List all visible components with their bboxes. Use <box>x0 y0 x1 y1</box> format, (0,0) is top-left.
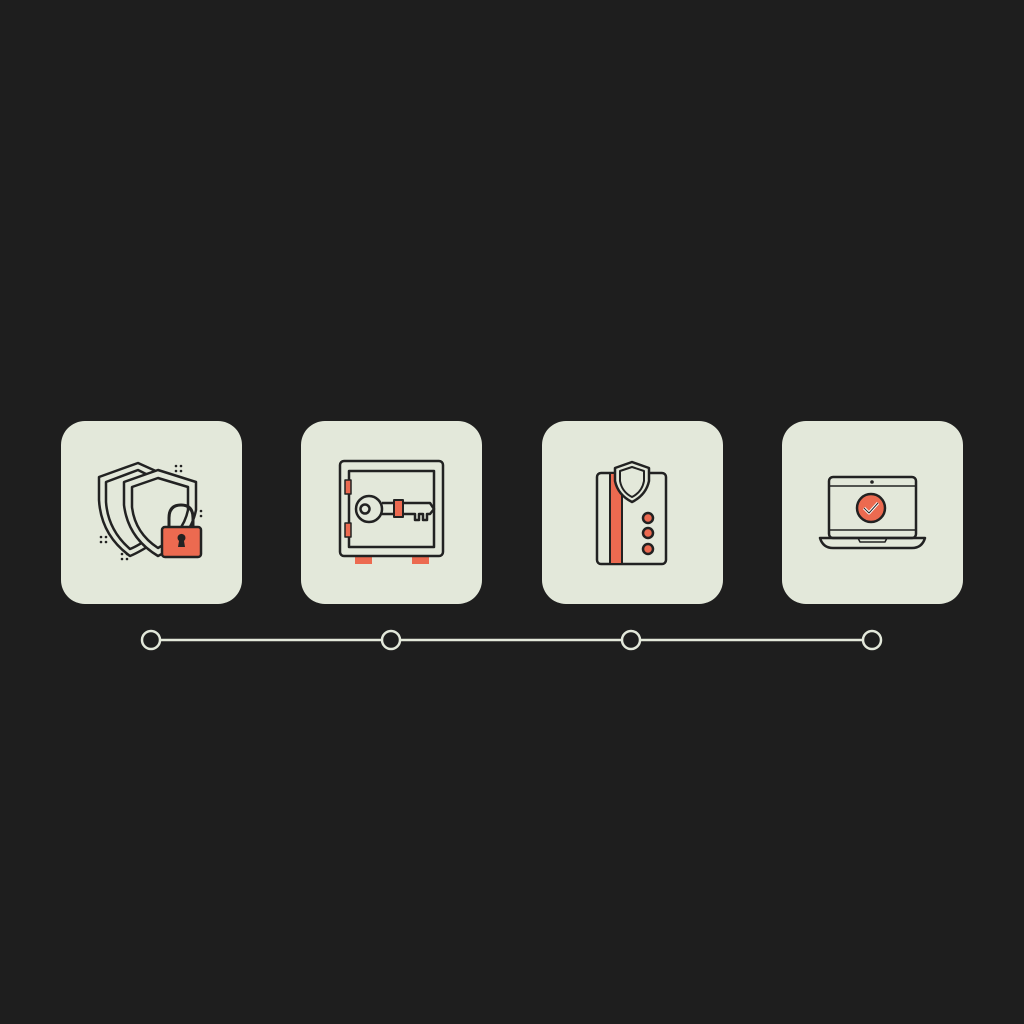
panel: card 2 safe with key <box>301 421 482 604</box>
timeline <box>142 631 881 649</box>
timeline node 1 <box>142 631 160 649</box>
timeline node 2 <box>382 631 400 649</box>
icon: laptop with check <box>820 477 925 548</box>
timeline node 4 <box>863 631 881 649</box>
icon: shields with padlock <box>99 463 202 560</box>
timeline node 3 <box>622 631 640 649</box>
panel: card 3 protected document <box>542 421 723 604</box>
panel: card 4 laptop verified <box>782 421 963 604</box>
icon: safe with key <box>340 461 443 564</box>
icon: document with shield <box>597 462 666 564</box>
panel: card 1 shield and lock <box>61 421 242 604</box>
